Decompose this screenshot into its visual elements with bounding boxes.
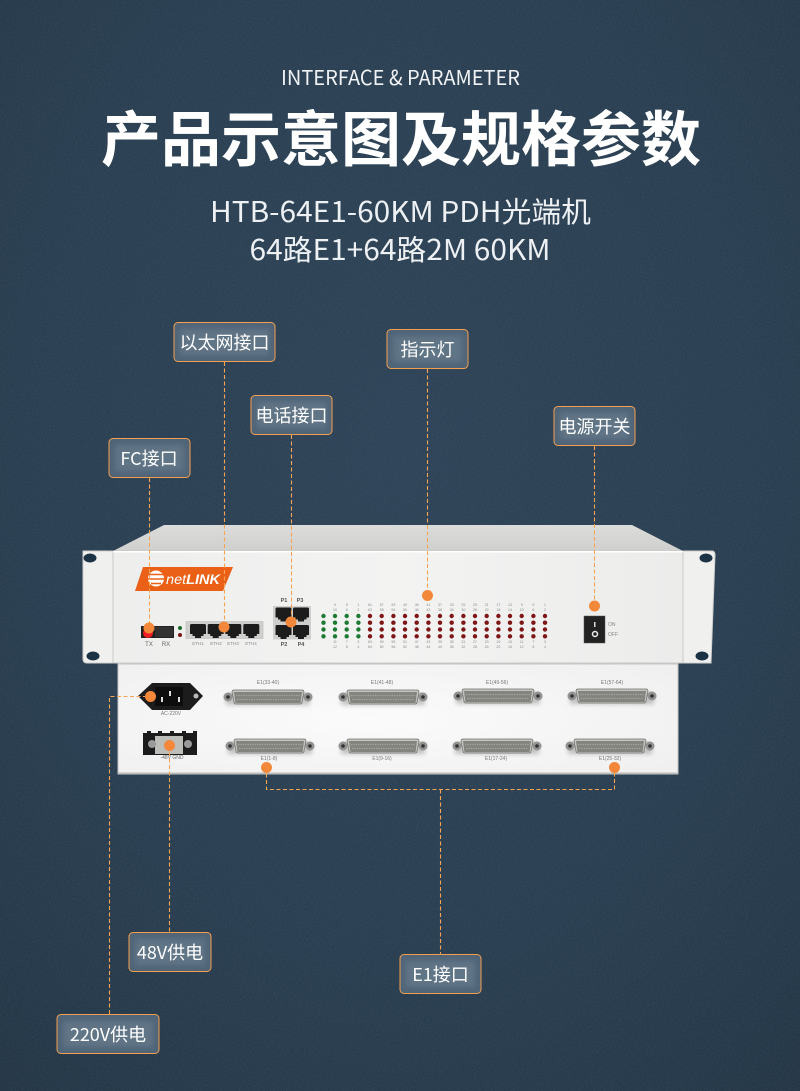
right rack ear <box>683 551 715 663</box>
LED channel numbers, top: 6 <box>346 608 348 612</box>
LED channel numbers, bottom: 11 <box>333 640 337 644</box>
LED channel numbers, bottom: 51 <box>403 640 407 644</box>
E1 connector: 41-48: E1(41-48) <box>371 680 393 686</box>
LED channel numbers, top: 5 <box>532 603 534 607</box>
E1 connector: 33-40 <box>224 680 312 705</box>
LED channel numbers, top: 2 <box>357 608 359 612</box>
LED channel numbers, top: 61 <box>368 603 372 607</box>
LED channel numbers, bottom: 43 <box>426 640 430 644</box>
Ethernet ports: ETH3 <box>227 641 239 646</box>
LED channel numbers, bottom: 31 <box>461 640 465 644</box>
label: indicators: 指示灯 <box>400 336 454 362</box>
LED channel numbers, top: 53 <box>391 603 395 607</box>
LED channel numbers, top: 18 <box>496 608 500 612</box>
label: 48V supply: 48V供电 <box>137 939 203 965</box>
device: front chassis <box>83 525 715 663</box>
label: 220V supply: 220V供电 <box>70 1021 146 1047</box>
48V terminal block: -48V GND <box>160 755 184 761</box>
E1 connector: 57-64: E1(57-64) <box>601 680 623 686</box>
telephone ports: P1 <box>281 598 287 604</box>
LED channel numbers, top: 57 <box>380 603 384 607</box>
LED channel numbers, top: 2 <box>544 608 546 612</box>
label: FC port <box>109 438 190 478</box>
LED channel numbers, bottom: 56 <box>391 645 395 649</box>
E1 connector: 25-32: E1(25-32) <box>599 756 621 762</box>
E1 connector: 57-64 <box>568 680 656 704</box>
LED channel numbers, top: 62 <box>368 608 372 612</box>
FC port: RX <box>162 642 170 648</box>
label: E1 port: E1接口 <box>412 961 469 987</box>
label: FC port: FC接口 <box>120 445 178 471</box>
LED channel numbers, top: 1 <box>357 603 359 607</box>
LED channel numbers, bottom: 27 <box>473 640 477 644</box>
LED channel numbers, bottom: 4 <box>544 645 546 649</box>
LED channel numbers, top: 13 <box>508 603 512 607</box>
power switch: OFF <box>608 632 618 638</box>
LED channel numbers, bottom: 39 <box>438 640 442 644</box>
LED channel numbers, bottom: 59 <box>380 640 384 644</box>
E1 connector: 1-8: E1(1-8) <box>261 756 278 762</box>
E1 connector: 9-16 <box>338 739 428 762</box>
LED channel numbers, top: 25 <box>473 603 477 607</box>
telephone ports: P4 <box>298 642 305 648</box>
label: Ethernet port: 以太网接口 <box>180 329 270 355</box>
label: power switch: 电源开关 <box>558 413 630 439</box>
label: power switch <box>554 406 635 446</box>
marker dots <box>144 590 620 773</box>
LED channel numbers, top: 29 <box>461 603 465 607</box>
LED channel numbers, top: 26 <box>473 608 477 612</box>
power switch <box>584 616 618 643</box>
device: rear panel <box>118 664 678 774</box>
LED channel numbers, top <box>333 603 546 612</box>
LED channel numbers, bottom: 24 <box>485 645 489 649</box>
LED channel numbers, top: 17 <box>496 603 500 607</box>
LED channel numbers, top: 42 <box>426 608 430 612</box>
FC port: TX <box>145 642 153 648</box>
LED channel numbers, top: 54 <box>391 608 395 612</box>
LED channel numbers, top: 49 <box>403 603 407 607</box>
FC port <box>141 626 182 648</box>
E1 connector: 49-56: E1(49-56) <box>486 680 508 686</box>
LED channel numbers, bottom: 4 <box>357 645 359 649</box>
Ethernet ports: ETH4 <box>245 641 257 646</box>
LED channel numbers, bottom: 7 <box>532 640 534 644</box>
LED channel numbers, bottom: 11 <box>520 640 524 644</box>
E1 connector: 1-8 <box>226 739 314 762</box>
LED channel numbers, bottom: 48 <box>415 645 419 649</box>
LED channel numbers, bottom: 32 <box>461 645 465 649</box>
LED channel numbers, top: 46 <box>415 608 419 612</box>
LED channel numbers, bottom: 3 <box>357 640 359 644</box>
front panel <box>113 551 683 663</box>
Ethernet ports: ETH2 <box>210 641 222 646</box>
model line 1: HTB-64E1-60KM PDH光端机 <box>210 190 591 231</box>
LED channel numbers, top: 50 <box>403 608 407 612</box>
E1 connector: 25-32 <box>566 739 654 762</box>
E1 connector: 41-48 <box>338 680 428 705</box>
LED channel numbers, top: 45 <box>415 603 419 607</box>
AC power socket: AC-220V <box>161 711 182 717</box>
subtitle: interface and parameter: INTERFACE & PARAMETER <box>281 61 520 91</box>
LED channel numbers, bottom: 23 <box>485 640 489 644</box>
leader lines <box>110 362 614 1014</box>
LED channel numbers, top: 22 <box>485 608 489 612</box>
LED channel numbers, bottom: 47 <box>415 640 419 644</box>
Ethernet ports: ETH1 <box>192 641 204 646</box>
LED channel numbers, bottom: 3 <box>544 640 546 644</box>
LED channel numbers, bottom: 52 <box>403 645 407 649</box>
Ethernet ports <box>186 622 263 646</box>
LED channel numbers, bottom: 44 <box>426 645 430 649</box>
LED channel numbers, bottom: 55 <box>391 640 395 644</box>
48V terminal block <box>143 731 197 761</box>
LED channel numbers, top: 14 <box>508 608 512 612</box>
LED channel numbers, bottom: 7 <box>346 640 348 644</box>
E1 connector: 17-24: E1(17-24) <box>485 756 507 762</box>
LED channel numbers, top: 21 <box>485 603 489 607</box>
E1 connector: 9-16: E1(9-16) <box>372 756 392 762</box>
power switch: ON <box>608 622 616 628</box>
LED channel numbers, top: 6 <box>532 608 534 612</box>
LED channel numbers, bottom: 8 <box>346 645 348 649</box>
LED channel numbers, top: 41 <box>426 603 430 607</box>
netLINK logo: netLINK <box>166 571 221 587</box>
title: 产品示意图及规格参数 <box>101 92 701 179</box>
model line 2: 64路E1+64路2M 60KM <box>250 228 550 269</box>
LED channel numbers, top: 9 <box>334 603 336 607</box>
label: indicators <box>387 330 468 368</box>
LED channel numbers, top: 1 <box>544 603 546 607</box>
LED channel numbers, top: 58 <box>380 608 384 612</box>
label: telephone port <box>251 396 332 434</box>
LED channel numbers, top: 30 <box>461 608 465 612</box>
LED channel numbers, bottom: 63 <box>368 640 372 644</box>
telephone ports <box>273 598 311 648</box>
telephone ports: P3 <box>297 598 303 604</box>
E1 connector: 33-40: E1(33-40) <box>257 680 279 686</box>
label: Ethernet port <box>174 322 275 362</box>
LED channel numbers, top: 33 <box>450 603 454 607</box>
LED channel numbers, top: 9 <box>521 603 523 607</box>
LED channel numbers, bottom: 19 <box>496 640 500 644</box>
label: 220V supply <box>57 1014 159 1054</box>
LED channel numbers, bottom: 8 <box>532 645 534 649</box>
LED channel numbers, bottom: 15 <box>508 640 512 644</box>
left rack ear <box>83 551 113 663</box>
LED channel numbers, bottom: 16 <box>508 645 512 649</box>
LED channel numbers, bottom: 12 <box>333 645 337 649</box>
LED channel numbers, bottom <box>333 640 546 649</box>
LED channel numbers, bottom: 36 <box>450 645 454 649</box>
AC power socket <box>138 683 203 717</box>
LED channel numbers, bottom: 64 <box>368 645 372 649</box>
LED channel numbers, bottom: 60 <box>380 645 384 649</box>
E1 connector: 49-56 <box>454 680 542 704</box>
LED channel numbers, top: 5 <box>346 603 348 607</box>
LED channel numbers, top: 34 <box>450 608 454 612</box>
LED channel numbers, top: 10 <box>333 608 337 612</box>
LED channel numbers, bottom: 35 <box>450 640 454 644</box>
LED channel numbers, bottom: 40 <box>438 645 442 649</box>
LED channel numbers, top: 38 <box>438 608 442 612</box>
telephone ports: P2 <box>281 642 287 648</box>
E1 connector: 17-24 <box>452 739 542 762</box>
netLINK logo <box>135 567 233 591</box>
label: 48V supply <box>129 932 211 972</box>
label: telephone port: 电话接口 <box>256 402 328 428</box>
label: E1 port <box>400 954 481 994</box>
LED channel numbers, bottom: 12 <box>520 645 524 649</box>
LED channel numbers, top: 37 <box>438 603 442 607</box>
LED indicators <box>321 603 547 649</box>
LED channel numbers, bottom: 20 <box>496 645 500 649</box>
chassis top cover <box>113 525 683 551</box>
LED channel numbers, bottom: 28 <box>473 645 477 649</box>
LED channel numbers, top: 10 <box>520 608 524 612</box>
